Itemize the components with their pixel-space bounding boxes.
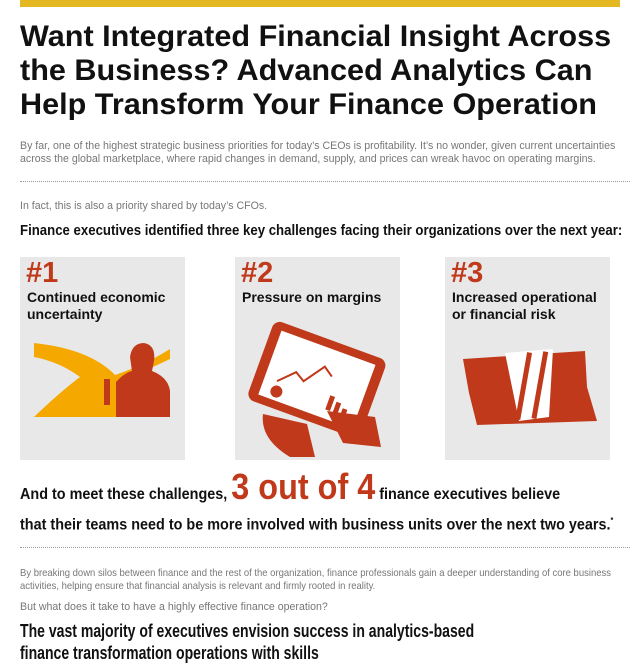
- heading: vast majority: The vast majority of executives envision success in analytics-based: [20, 621, 474, 641]
- panel: challenge 2: [235, 257, 400, 460]
- intro text: across the global marketplace, where rapid changes in demand, supply, and prices can wreak havoc on operating margins.: [20, 153, 596, 165]
- text: silos: activities, helping ensure that financial analysis is relevant and firmly rooted in reality.: [20, 581, 375, 592]
- intro text: [20, 140, 615, 165]
- panel: challenge 1: uncertainty: [27, 306, 102, 322]
- intro text: By far, one of the highest strategic business priorities for today’s CEOs is profitability. It’s no wonder, given current uncertainties: [20, 140, 615, 152]
- panel: challenge 3: Increased operational: [452, 289, 597, 305]
- text: silos: By breaking down silos between finance and the rest of the organization, finance professionals gain a deeper understanding of core business: [20, 568, 611, 579]
- icon: road and presenter: [34, 343, 170, 417]
- heading: vast majority: [20, 621, 474, 663]
- title: Want Integrated Financial Insight Across: [20, 20, 611, 53]
- title: Help Transform Your Finance Operation: [20, 88, 597, 121]
- panel: challenge 1: #1: [26, 257, 58, 289]
- title: [20, 20, 611, 121]
- callout: 3 out of 4: And to meet these challenges, 3 out of 4 finance executives believe: [20, 466, 560, 507]
- panel: challenge 1: Continued economic: [27, 289, 165, 305]
- panel: challenge 3: #3: [451, 257, 483, 289]
- heading: vast majority: finance transformation operations with skills: [20, 643, 319, 663]
- challenges heading: Finance executives identified three key challenges facing their organizations over the next year:: [20, 222, 622, 239]
- callout: 3 out of 4: that their teams need to be more involved with business units over the next two years.*: [20, 516, 613, 533]
- panel: challenge 2: #2: [241, 257, 273, 289]
- icon: money stack: [463, 349, 597, 425]
- panel: challenge 2: Pressure on margins: [242, 289, 381, 305]
- CFO text: In fact, this is also a priority shared by today’s CFOs.: [20, 200, 267, 212]
- icon: tablet with chart: [248, 322, 386, 457]
- panel: challenge 3: or financial risk: [452, 306, 555, 322]
- text: silos: [20, 568, 611, 592]
- callout: 3 out of 4: [20, 466, 614, 533]
- panel: challenge 3: [445, 257, 610, 460]
- panel: challenge 1: [20, 257, 185, 460]
- text: question: But what does it take to have a highly effective finance operation?: [20, 601, 328, 613]
- top bar: [20, 0, 620, 7]
- title: the Business? Advanced Analytics Can: [20, 54, 593, 87]
